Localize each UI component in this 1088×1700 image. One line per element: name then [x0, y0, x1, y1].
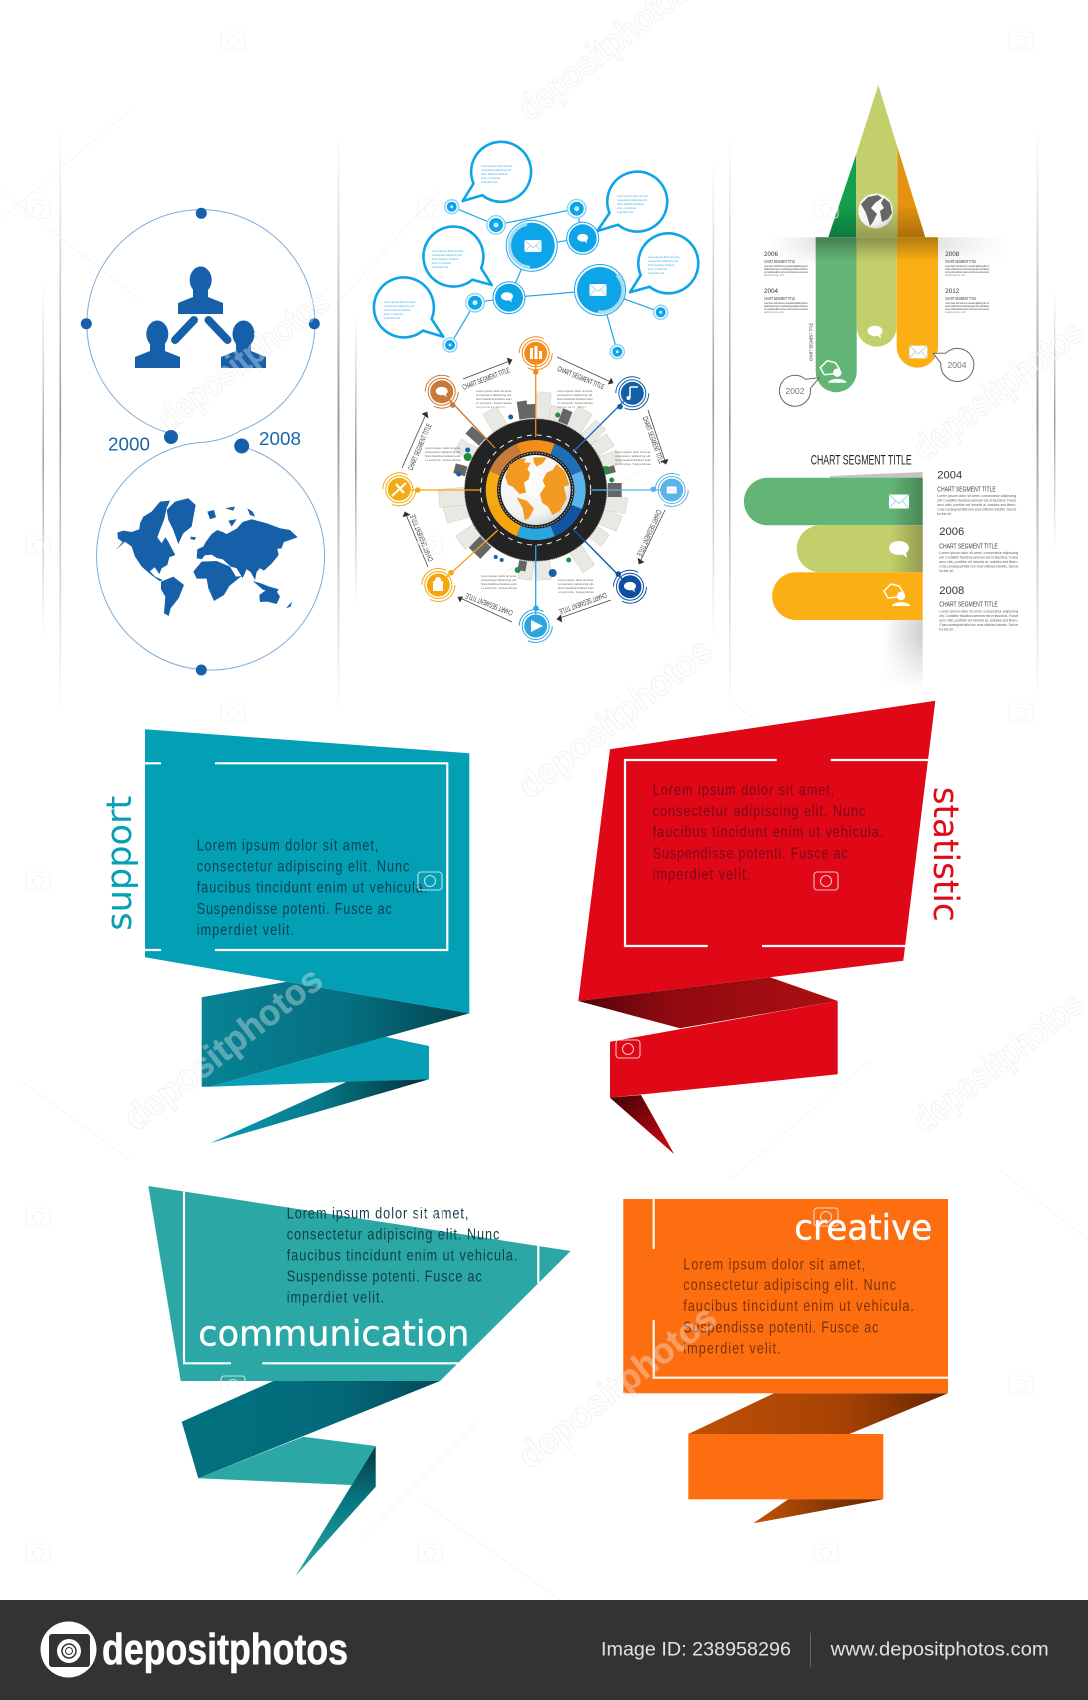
segment descriptions: ut vehicula. Suspendisse: [425, 458, 461, 462]
text 2006: adipiscing elit: [764, 274, 784, 277]
icon: mail: [909, 346, 927, 358]
segment descriptions: Nunc faucibus tincidunt enim: [476, 397, 512, 401]
bubble captions: [384, 164, 680, 320]
segment titles: CHART SEGMENT TITLE: [558, 591, 608, 616]
ribbon fold: [578, 977, 838, 1028]
text 2008 block: Cras consequat felis non eros ultricies lobortis. Sed et: [939, 623, 1018, 627]
banner text: faucibus tincidunt enim ut vehicula.: [197, 880, 427, 897]
text 2006 block: [939, 526, 1018, 573]
text 2008 block: [939, 585, 1018, 632]
footer logo text: depositphotos: [102, 1625, 348, 1674]
bubble captions: consectetur adipiscing elit.: [432, 253, 463, 257]
bubble captions: enim ut vehicula.: [432, 261, 452, 265]
banner text: imperdiet velit.: [653, 866, 750, 884]
ribbon tail: [210, 1079, 429, 1143]
segment descriptions: ut vehicula. Suspendisse: [476, 401, 512, 405]
banner text: Lorem ipsum dolor sit amet,: [653, 782, 834, 799]
small nodes: [443, 200, 668, 359]
road ring: [465, 419, 607, 561]
segment descriptions: ut vehicula. Suspendisse: [558, 590, 594, 594]
text 2008 block: elit. Curabitur faucibus aenean est et faucibus. Fusce: [939, 614, 1018, 618]
text 2006 block: Lorem ipsum dolor sit amet, consectetur adipiscing: [939, 551, 1018, 555]
text 2006: ac imperdiet velit lorem ipsum dolor sit amet consectetur: [764, 271, 808, 274]
arrows around the chart: [402, 357, 668, 622]
vertical chart label: CHART SEGMENT TITLE: [808, 323, 814, 361]
callout 2004: [933, 348, 974, 381]
bubble captions: enim ut vehicula.: [617, 206, 637, 210]
segment descriptions: consectetur adipiscing elit.: [476, 393, 512, 397]
segment titles: CHART SEGMENT TITLE: [556, 364, 606, 391]
segment descriptions: ut vehicula. Suspendisse: [557, 401, 593, 405]
timeline dots: [81, 208, 320, 676]
callout 2002: [779, 375, 819, 406]
ribbon lower band: [688, 1434, 883, 1499]
text 2008: CHART SEGMENT TITLE: [945, 259, 976, 264]
ribbon fold: [202, 982, 469, 1087]
connected circle outlines: [87, 210, 325, 670]
bar top shadow: [830, 472, 923, 478]
text 2004: faucibus tincidunt enim ut vehicula suspendisse potenti fusce: [764, 305, 809, 308]
text 2004 block: Cras consequat felis non eros ultricies lobortis. Sed et: [937, 508, 1016, 512]
panel: support banner: [100, 729, 469, 1143]
ribbon lower band: [610, 1001, 838, 1098]
banner frame: [184, 1192, 538, 1363]
banner text: [683, 1256, 914, 1358]
segment titles: CHART SEGMENT TITLE: [641, 415, 666, 465]
callout 2002: 2002: [786, 386, 805, 396]
text 2012: Lorem ipsum dolor sit amet, consectetur adipiscing elit nunc: [945, 302, 990, 305]
bubble captions: Nunc faucibus tincidunt: [432, 257, 459, 261]
text 2008 block: arcu nibh, porttitor vel lobortis at, sodales sed libero.: [939, 618, 1018, 622]
watermarks: depositphotos: [150, 280, 336, 438]
arrow head triangle: [828, 85, 925, 237]
text 2004: Lorem ipsum dolor sit amet, consectetur adipiscing elit nunc: [764, 302, 809, 305]
text 2006: [764, 251, 809, 277]
banner text: Lorem ipsum dolor sit amet,: [287, 1205, 468, 1223]
bubble captions: enim ut vehicula.: [648, 267, 668, 271]
text 2004 block: 2004: [937, 469, 962, 481]
text 2008 block: CHART SEGMENT TITLE: [939, 602, 998, 609]
bubble captions: imperdiet velit.: [481, 180, 498, 184]
segment descriptions: Nunc faucibus tincidunt enim: [481, 582, 518, 586]
text 2004: CHART SEGMENT TITLE: [764, 296, 795, 301]
node: chart yellow plane: [383, 473, 421, 506]
segment descriptions: consectetur adipiscing elit.: [481, 578, 517, 582]
watermarks: depositphotos: [116, 958, 330, 1138]
text 2006 block: Cras consequat felis non eros ultricies lobortis. Sed et: [939, 564, 1018, 568]
bar green: [744, 478, 923, 525]
banner frame: [625, 760, 928, 946]
segment titles: CHART SEGMENT TITLE: [461, 366, 511, 392]
icon: chat: [868, 326, 882, 338]
bubble captions: Lorem ipsum dolor sit amet,: [432, 249, 464, 253]
ribbon tail: [296, 1446, 376, 1576]
bubble captions: enim ut vehicula.: [384, 312, 404, 316]
text 2012: [945, 288, 990, 314]
bubble captions: enim ut vehicula.: [481, 176, 501, 180]
text 2004: [764, 288, 809, 314]
bubble captions: consectetur adipiscing elit.: [648, 259, 679, 263]
ribbon fold: [688, 1393, 948, 1434]
segment descriptions: imperdiet velit.: [476, 405, 506, 409]
segment titles: CHART SEGMENT TITLE: [635, 508, 664, 558]
banner text: Suspendisse potenti. Fusce ac: [287, 1269, 482, 1286]
banner text: faucibus tincidunt enim ut vehicula.: [287, 1247, 517, 1265]
text 2004 block: turbis sit: [937, 512, 951, 516]
panel: statistic banner: [578, 701, 965, 1154]
segment titles: CHART SEGMENT TITLE: [408, 513, 435, 563]
text 2008 block: turbis sit: [939, 628, 953, 632]
banner text: imperdiet velit.: [683, 1340, 781, 1358]
watermarks: depositphotos: [510, 1296, 724, 1476]
ribbon tail: [610, 1095, 674, 1154]
banner label: support: [100, 796, 140, 931]
text 2004: ac imperdiet velit lorem ipsum dolor sit amet consectetur: [764, 308, 808, 311]
banner text: consectetur adipiscing elit. Nunc: [683, 1277, 896, 1294]
text 2012: faucibus tincidunt enim ut vehicula suspendisse potenti fusce: [945, 305, 990, 308]
bubble captions: Nunc faucibus tincidunt: [648, 263, 675, 267]
banner body: [578, 701, 935, 1001]
node: chart amber cup: [422, 568, 455, 602]
segment titles: CHART SEGMENT TITLE: [406, 422, 434, 472]
text 2008: adipiscing elit: [945, 274, 966, 277]
banner text: Lorem ipsum dolor sit amet,: [683, 1256, 865, 1274]
text 2004 block: CHART SEGMENT TITLE: [937, 487, 996, 494]
bubble captions: imperdiet velit.: [648, 271, 665, 275]
bubble captions: Lorem ipsum dolor sit amet,: [617, 194, 649, 198]
text 2008: ac imperdiet velit lorem ipsum dolor sit amet consectetur: [945, 271, 990, 274]
banner text: Suspendisse potenti. Fusce ac: [653, 845, 848, 863]
node: chart blue music: [616, 377, 649, 410]
buildings around the road: [438, 392, 628, 580]
banner text: imperdiet velit.: [287, 1290, 384, 1307]
segment descriptions: ut vehicula. Suspendisse: [481, 586, 517, 590]
text 2006 block: CHART SEGMENT TITLE: [939, 543, 998, 550]
text 2004 block: elit. Curabitur faucibus aenean est et faucibus. Fusce: [937, 498, 1016, 502]
bubble captions: Nunc faucibus tincidunt: [481, 172, 508, 176]
segment descriptions: Lorem ipsum dolor sit amet,: [558, 578, 594, 582]
panel: blue network with speech bubbles: [374, 142, 698, 359]
text 2006: Lorem ipsum dolor sit amet, consectetur adipiscing elit nunc: [764, 265, 809, 268]
world map: [116, 498, 298, 616]
year label 2008: 2008: [259, 428, 301, 449]
banner frame: [654, 1199, 948, 1378]
network connectors: [450, 207, 661, 352]
connector lines: [399, 353, 672, 626]
text 2012: CHART SEGMENT TITLE: [945, 296, 976, 301]
node: chart brown chat: [425, 375, 458, 408]
footer bar: [0, 1600, 1088, 1700]
segment descriptions: consectetur adipiscing elit.: [558, 582, 594, 586]
ribbon lower band: [198, 1437, 376, 1485]
text 2006 block: elit. Curabitur faucibus aenean est et faucibus. Fusce: [939, 556, 1018, 560]
banner text: consectetur adipiscing elit. Nunc: [287, 1226, 499, 1244]
bubble captions: consectetur adipiscing elit.: [384, 304, 415, 308]
website url: www.depositphotos.com: [830, 1639, 1049, 1661]
icon: grey globe: [858, 194, 893, 228]
panel: creative banner: [623, 1199, 948, 1523]
text 2006 block: arcu nibh, porttitor vel lobortis at, sodales sed libero.: [939, 560, 1018, 564]
text 2008 block: Lorem ipsum dolor sit amet, consectetur adipiscing: [939, 610, 1018, 614]
cast shadow below bars: [875, 620, 923, 690]
panel: arrow strip chart: [764, 85, 1015, 406]
callout 2004: 2004: [948, 360, 967, 370]
speech bubbles: [374, 142, 698, 337]
banner text: Suspendisse potenti. Fusce ac: [683, 1319, 878, 1337]
text 2006: CHART SEGMENT TITLE: [764, 259, 795, 264]
coloured ring segments: [491, 446, 580, 534]
bar olive: [797, 525, 923, 572]
panel: horizontal bars chart: [744, 451, 1018, 690]
text 2004 block: arcu nibh, porttitor vel lobortis at, sodales sed libero.: [937, 503, 1016, 507]
panel: communication banner: [148, 1186, 571, 1576]
panel: circles with people and world map: [81, 208, 325, 676]
banner text: consectetur adipiscing elit. Nunc: [197, 859, 409, 876]
node: chart sky blue play: [519, 606, 552, 642]
segment titles: [406, 364, 666, 617]
text 2008: Lorem ipsum dolor sit amet, consectetur adipiscing elit nunc: [945, 265, 990, 268]
icon: connected people: [135, 266, 266, 368]
image id: Image ID: 238958296: [601, 1639, 791, 1661]
banner text: faucibus tincidunt enim ut vehicula.: [683, 1298, 914, 1315]
banner body: [148, 1186, 571, 1381]
banner frame: [145, 763, 447, 950]
banner text: Suspendisse potenti. Fusce ac: [197, 901, 392, 918]
text 2012: ac imperdiet velit lorem ipsum dolor sit amet consectetur: [945, 308, 990, 311]
watermarks: [116, 0, 1088, 1476]
fold shadows: [765, 237, 1015, 266]
bubble captions: consectetur adipiscing elit.: [617, 198, 648, 202]
text 2008: faucibus tincidunt enim ut vehicula suspendisse potenti fusce: [945, 268, 990, 271]
bubble captions: Nunc faucibus tincidunt: [384, 308, 411, 312]
text 2006 block: turbis sit: [939, 569, 953, 573]
ribbon lower band: [210, 1037, 429, 1087]
text 2004 block: Lorem ipsum dolor sit amet, consectetur adipiscing: [937, 494, 1016, 498]
text 2006 block: 2006: [939, 526, 964, 538]
segment descriptions: consectetur adipiscing elit.: [557, 393, 593, 397]
bubble captions: Nunc faucibus tincidunt: [617, 202, 644, 206]
banner text: [653, 782, 883, 884]
segment descriptions: Lorem ipsum dolor sit amet,: [557, 389, 593, 393]
node: large mail 2: [574, 264, 626, 316]
bar orange: [772, 572, 923, 620]
text 2008: 2008: [945, 251, 960, 258]
banner text: imperdiet velit.: [197, 922, 294, 939]
node: chart orange: [519, 337, 552, 375]
segment descriptions: imperdiet velit.: [557, 405, 587, 409]
segment descriptions: Lorem ipsum dolor sit amet,: [476, 389, 512, 393]
segment descriptions: ut vehicula. Suspendisse: [615, 462, 651, 466]
segment descriptions: Lorem ipsum dolor sit amet,: [615, 450, 651, 454]
bubble captions: Lorem ipsum dolor sit amet,: [384, 300, 416, 304]
banner text: [287, 1205, 517, 1307]
text 2004: 2004: [764, 288, 779, 295]
segment descriptions: [425, 389, 652, 594]
vertical strips: [816, 237, 938, 392]
footer logo icon: [40, 1622, 96, 1678]
segment descriptions: consectetur adipiscing elit.: [425, 450, 461, 454]
node: medium chat 2: [493, 282, 525, 314]
icon: orange globe: [497, 452, 574, 528]
segment descriptions: Lorem ipsum dolor sit amet,: [481, 574, 517, 578]
segment descriptions: Nunc faucibus tincidunt enim: [425, 454, 462, 458]
segment descriptions: Nunc faucibus tincidunt enim: [558, 586, 594, 590]
banner label: communication: [198, 1315, 469, 1355]
banner label: creative: [794, 1208, 932, 1248]
node: chart dark blue: [614, 570, 646, 603]
segment descriptions: Lorem ipsum dolor sit amet,: [425, 446, 461, 450]
text 2004 block: [937, 469, 1016, 516]
text 2004: adipiscing elit: [764, 311, 784, 314]
watermarks: depositphotos: [510, 629, 720, 806]
node: medium chat: [567, 222, 599, 254]
segment descriptions: Nunc faucibus tincidunt enim: [615, 458, 652, 462]
bubble captions: consectetur adipiscing elit.: [481, 168, 512, 172]
bubble captions: Lorem ipsum dolor sit amet,: [481, 164, 513, 168]
bubble captions: imperdiet velit.: [384, 316, 401, 320]
banner body: [623, 1199, 948, 1393]
text 2012: 2012: [945, 288, 960, 295]
segment descriptions: consectetur adipiscing elit.: [615, 454, 651, 458]
banner text: [197, 838, 427, 939]
text 2008: [945, 251, 990, 277]
segment titles: CHART SEGMENT TITLE: [464, 591, 514, 617]
year label 2000: 2000: [108, 434, 150, 455]
text 2006: faucibus tincidunt enim ut vehicula suspendisse potenti fusce: [764, 268, 809, 271]
banner text: Lorem ipsum dolor sit amet,: [197, 838, 378, 855]
bubble captions: Lorem ipsum dolor sit amet,: [648, 255, 680, 259]
bubble captions: imperdiet velit.: [432, 265, 449, 269]
banner text: faucibus tincidunt enim ut vehicula.: [653, 824, 883, 841]
segment descriptions: Nunc faucibus tincidunt enim: [557, 397, 594, 401]
ribbon tail: [753, 1499, 883, 1523]
panel: circular road chart: [383, 337, 688, 642]
banner text: consectetur adipiscing elit. Nunc: [653, 803, 865, 820]
node: large mail: [506, 220, 557, 271]
text 2008 block: 2008: [939, 585, 964, 597]
ribbon fold: [182, 1381, 440, 1478]
chart heading: CHART SEGMENT TITLE: [811, 451, 912, 467]
bubble captions: imperdiet velit.: [617, 210, 634, 214]
banner label: statistic: [925, 787, 965, 922]
banner body: [145, 729, 469, 1013]
node: chart light blue: [650, 474, 688, 506]
text 2012: adipiscing elit: [945, 311, 966, 314]
text 2006: 2006: [764, 251, 779, 258]
icon: headset person: [820, 361, 846, 383]
